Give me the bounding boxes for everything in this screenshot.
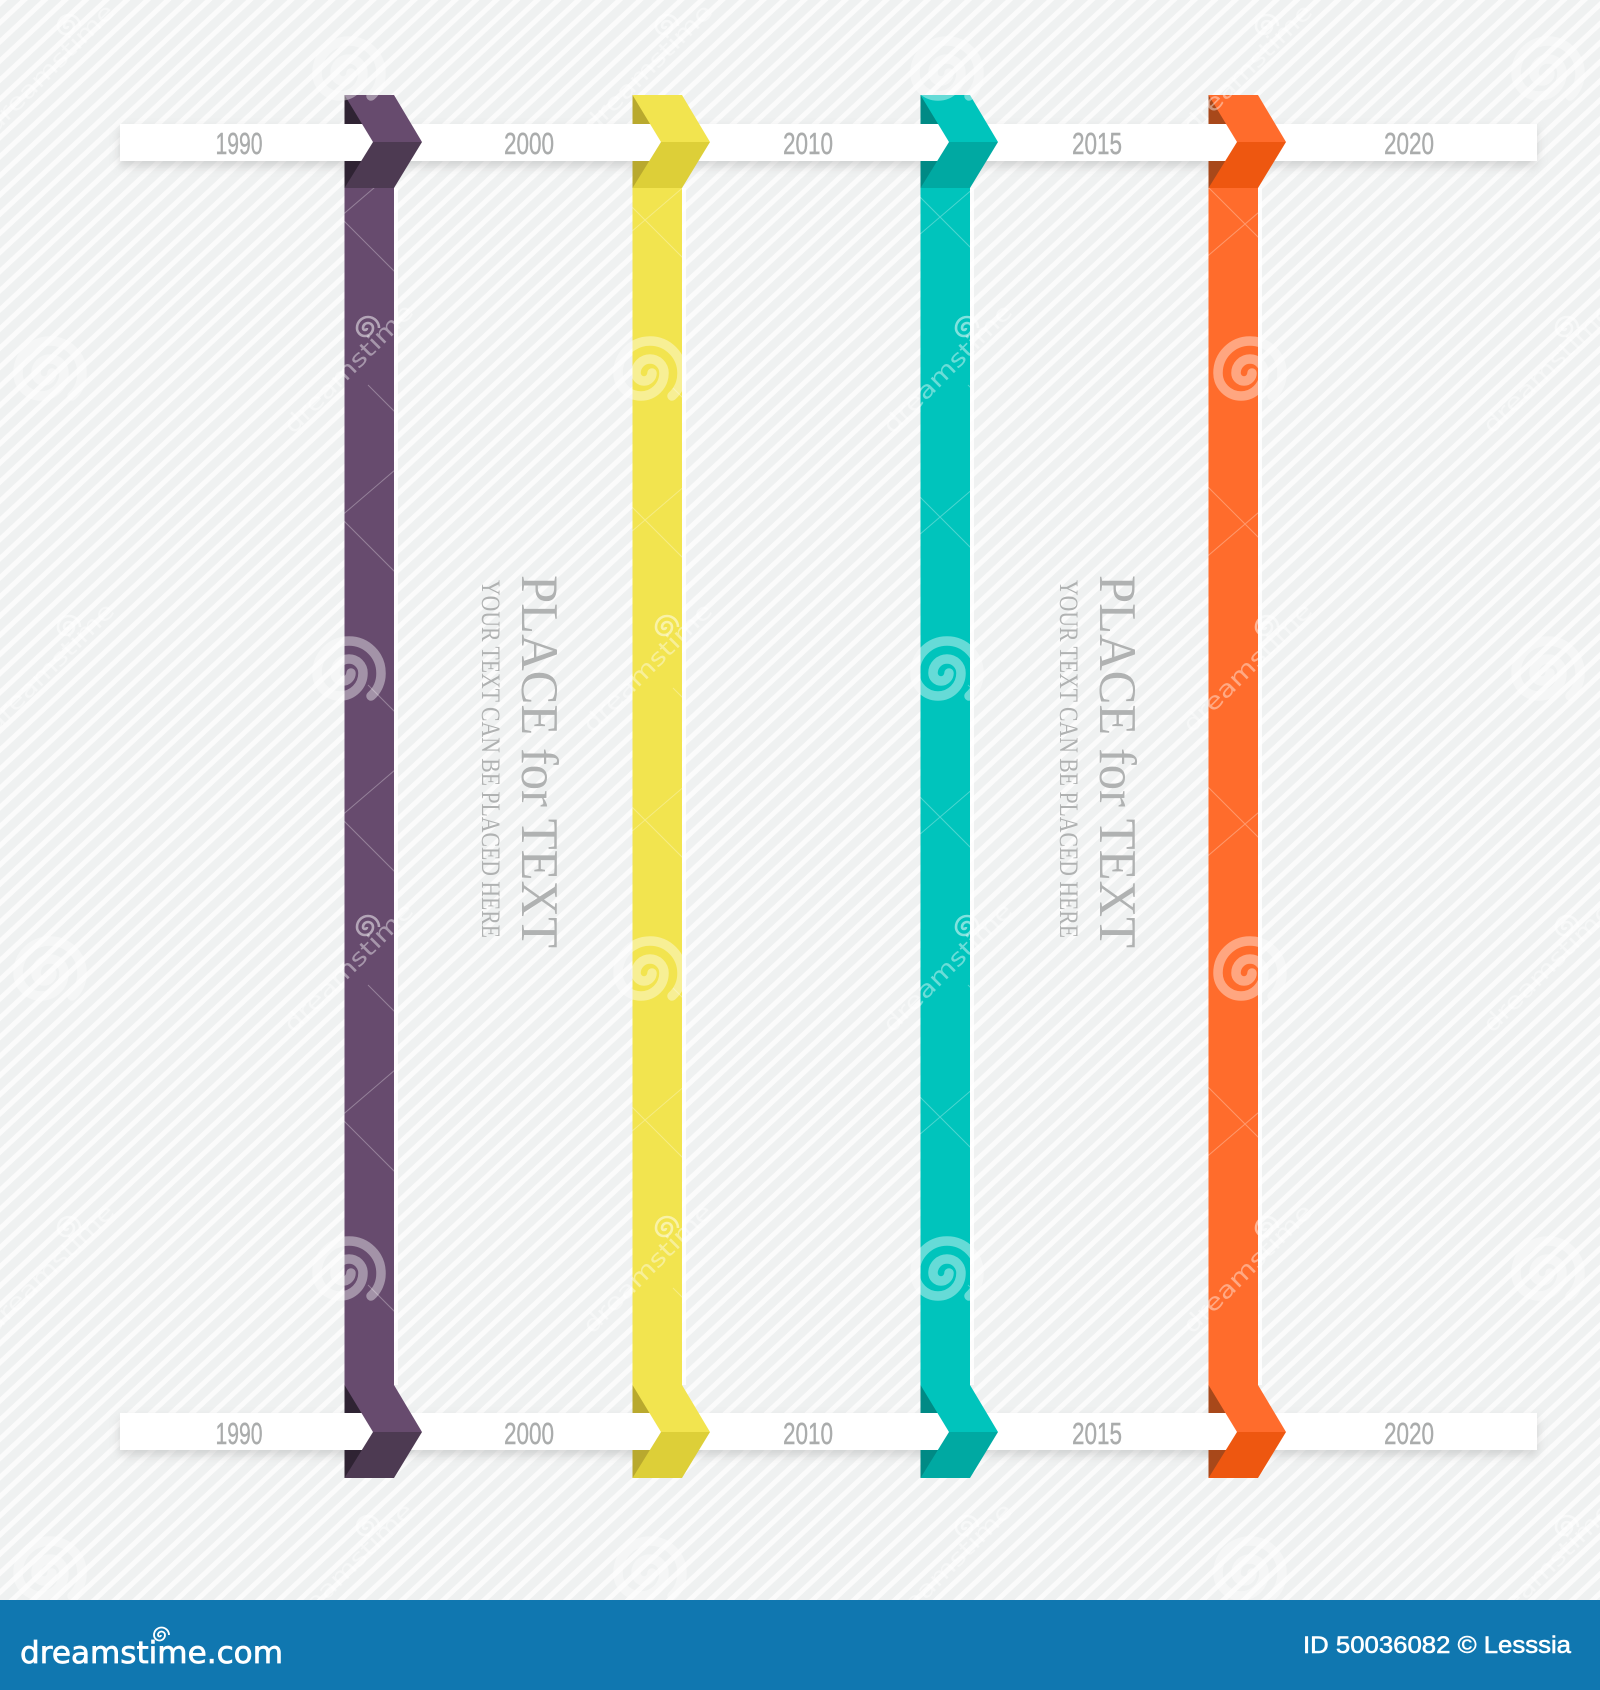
watermark text: dreamstime <box>578 598 718 738</box>
watermark text: dreamstime <box>279 299 419 439</box>
bottom year labels: 2010 <box>783 1416 833 1451</box>
vertical text block: left <box>476 575 568 948</box>
watermark text: dreamstime <box>1178 598 1318 738</box>
footer bar <box>0 1600 1600 1690</box>
watermark text: dreamstime <box>578 0 718 139</box>
top timeline band <box>120 124 1537 166</box>
bottom timeline band <box>120 1413 1537 1455</box>
watermark text: dreamstime <box>1478 898 1600 1038</box>
bottom year labels: 2000 <box>504 1416 554 1451</box>
watermark text: dreamstime <box>878 898 1018 1038</box>
bottom year labels <box>216 1416 1434 1451</box>
watermark text: dreamstime <box>578 1199 718 1339</box>
footer logo spiral <box>154 1628 169 1640</box>
vertical text block: right: PLACE for TEXT <box>1088 575 1146 948</box>
ribbon: orange <box>1208 95 1286 1478</box>
ribbon: purple <box>344 95 422 1478</box>
ribbon: yellow <box>632 95 710 1478</box>
top year labels: 2015 <box>1072 126 1122 161</box>
watermark text: dreamstime <box>279 898 419 1038</box>
top year labels: 1990 <box>216 126 262 161</box>
top year labels: 2000 <box>504 126 554 161</box>
watermark text: dreamstime <box>1178 0 1318 139</box>
watermark text: dreamstime <box>279 1498 419 1638</box>
footer image id and credit: ID 50036082 © Lesssia <box>1303 1632 1571 1659</box>
watermark text: dreamstime <box>1478 1498 1600 1638</box>
vertical text block: right <box>1054 575 1146 948</box>
top year labels: 2010 <box>783 126 833 161</box>
watermark text: dreamstime <box>878 299 1018 439</box>
watermark text: dreamstime <box>878 1498 1018 1638</box>
footer logo text: dreamstime.com <box>20 1636 283 1671</box>
bottom year labels: 1990 <box>216 1416 262 1451</box>
top year labels <box>216 126 1434 161</box>
vertical text block: right: YOUR TEXT CAN BE PLACED HERE <box>1054 580 1083 938</box>
top year labels: 2020 <box>1384 126 1434 161</box>
watermark text: dreamstime <box>1478 299 1600 439</box>
ribbon: teal <box>920 95 998 1478</box>
bottom year labels: 2020 <box>1384 1416 1434 1451</box>
vertical text block: left: PLACE for TEXT <box>510 575 568 948</box>
bottom year labels: 2015 <box>1072 1416 1122 1451</box>
vertical text block: left: YOUR TEXT CAN BE PLACED HERE <box>476 580 505 938</box>
watermark text: dreamstime <box>1178 1199 1318 1339</box>
